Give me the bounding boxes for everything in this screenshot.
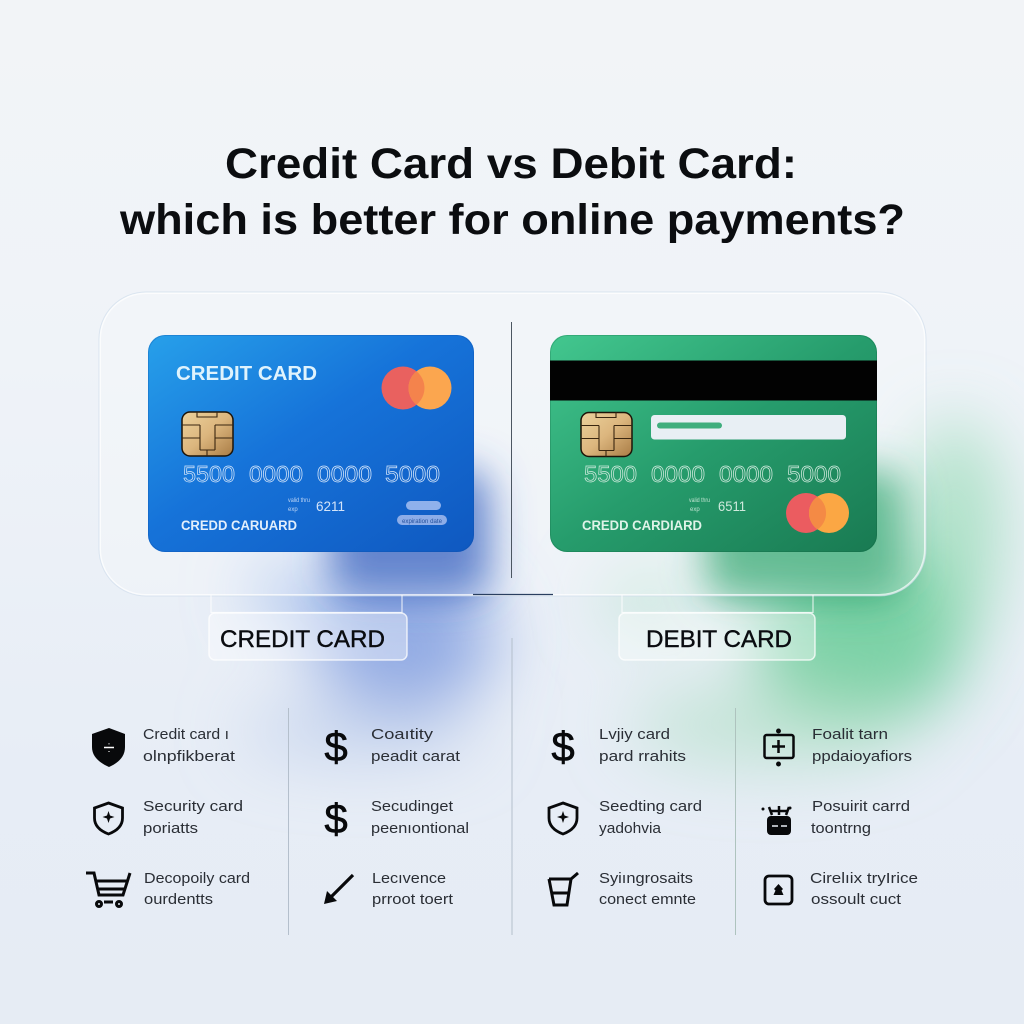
credit card small data: exp: [288, 507, 298, 513]
text: feature 10: [372, 871, 453, 908]
text: feature 12: [810, 871, 918, 908]
text: feature 1: Credit card ı: [143, 727, 229, 743]
icon: shopping cart: [86, 873, 130, 906]
icon: outline shield: [549, 803, 577, 834]
credit card illustration: [148, 335, 474, 552]
debit card number: 5000: [787, 461, 841, 487]
text: feature 9: [144, 871, 250, 908]
title: which is better for online payments?: [119, 196, 905, 244]
text: feature 1: olnpfikberat: [143, 749, 235, 765]
glow: green core: [705, 470, 905, 598]
text: feature 3: Lvjiy card: [599, 727, 670, 743]
icon: cup: [549, 873, 578, 905]
text: feature 7: [599, 799, 702, 837]
title: [119, 140, 905, 244]
text: feature 12: ossoult cuct: [811, 892, 901, 908]
text: feature 6: [371, 799, 469, 837]
text: feature 2: peadit carat: [371, 749, 460, 765]
debit card small data: valid thru: [689, 498, 710, 504]
icon: outline shield: [94, 803, 122, 834]
panel: glass comparison container: [99, 292, 926, 596]
credit card small data: 6211: [316, 498, 345, 514]
glow: green: [600, 420, 1000, 765]
text: feature 11: Syiıngrosaits: [599, 871, 693, 887]
text: feature 4: ppdaioyafiors: [812, 749, 912, 765]
text: feature 8: [811, 799, 910, 837]
text: feature 4: [812, 727, 912, 765]
text: feature 7: yadohvia: [599, 821, 662, 837]
credit card number: 5500: [183, 461, 235, 487]
text: feature 3: pard rrahits: [599, 749, 686, 765]
text: feature 7: Seedting card: [599, 799, 702, 815]
credit card pills: expiration date: [402, 519, 443, 525]
credit card pills: [397, 501, 447, 525]
text: feature 11: conect emnte: [599, 892, 696, 908]
credit card number: 0000: [317, 461, 372, 487]
text: feature 4: Foalit tarn: [812, 727, 888, 743]
text: feature 2: Coaıtity: [371, 727, 434, 743]
text: feature 8: Posuirit carrd: [812, 799, 910, 815]
glow: blue: [240, 560, 495, 760]
credit card number: 0000: [249, 461, 303, 487]
text: feature 11: [599, 871, 696, 908]
debit card small data: 6511: [718, 498, 746, 514]
label: debit card: DEBIT CARD: [646, 626, 792, 653]
credit card heading: CREDIT CARD: [176, 363, 317, 385]
credit card number: [183, 461, 440, 487]
debit card small data: [689, 498, 746, 514]
magnetic stripe: [550, 360, 877, 400]
credit card name: CREDD CARUARD: [181, 518, 297, 533]
text: feature 5: Security card: [143, 799, 243, 815]
icon: solid shield: [92, 728, 125, 767]
credit card chip: [182, 412, 233, 456]
text: feature 10: Lecıvence: [372, 871, 446, 887]
glow: blue core: [330, 470, 490, 595]
debit card name: CREDD CARDIARD: [582, 518, 702, 533]
icon: arrow: [324, 875, 353, 904]
icon: basket: [762, 806, 792, 835]
label: credit card: CREDIT CARD: [220, 626, 385, 653]
debit card small data: exp: [690, 507, 700, 513]
debit card number: 0000: [719, 461, 773, 487]
label: credit card: [209, 595, 407, 660]
text: feature 10: prroot toert: [372, 892, 453, 908]
credit card logo: [382, 366, 452, 410]
label: debit card: [619, 595, 815, 660]
debit card logo: [786, 493, 849, 533]
text: feature 9: Decopoily card: [144, 871, 250, 887]
debit card illustration: [550, 335, 877, 552]
text: feature 1: [143, 727, 235, 765]
text: feature 6: peenıontional: [371, 821, 469, 837]
icon: dollar: $: [324, 723, 348, 770]
credit card small data: valid thru: [288, 498, 310, 504]
icon: square badge: [765, 876, 792, 904]
debit card number: 5500: [584, 461, 637, 487]
debit card number: 0000: [651, 461, 705, 487]
text: feature 2: [371, 727, 460, 765]
debit card chip: [581, 412, 632, 456]
icon: card plus: [764, 730, 794, 765]
credit card small data: [288, 498, 345, 514]
text: feature 8: toontrng: [811, 821, 871, 837]
text: feature 9: ourdentts: [144, 892, 213, 908]
credit card number: 5000: [385, 461, 440, 487]
text: feature 5: [143, 799, 243, 837]
text: feature 12: Cirelıix tryIrice: [810, 871, 918, 887]
icon: dollar: $: [324, 795, 348, 842]
text: feature 3: [599, 727, 686, 765]
debit card number: [584, 461, 841, 487]
text: feature 5: poriatts: [143, 821, 198, 837]
title: Credit Card vs Debit Card:: [225, 140, 797, 188]
signature panel: [651, 415, 846, 440]
text: feature 6: Secudinget: [371, 799, 453, 815]
icon: dollar: $: [551, 723, 575, 770]
